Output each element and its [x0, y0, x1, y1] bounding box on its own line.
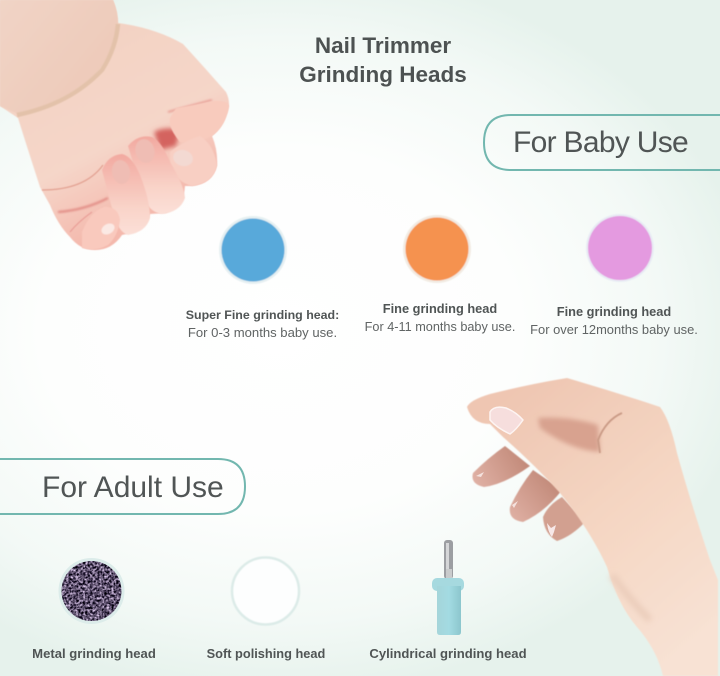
adult thumbnail [490, 407, 523, 434]
adult lower fingers [472, 446, 585, 541]
text: fine grinding head 4-11 months: For 4-11 months baby use. [365, 320, 515, 334]
label: soft polishing head: Soft polishing head [207, 646, 325, 661]
icon: baby hand [0, 0, 229, 250]
icon: metal grinding head [58, 558, 124, 624]
title [299, 33, 467, 87]
text: super fine grinding head: Super Fine grinding head: [186, 308, 339, 322]
label: cylindrical grinding head: Cylindrical grinding head [369, 646, 527, 661]
icon: baby fingers [82, 101, 229, 249]
text: fine grinding head over 12 months [530, 304, 698, 337]
icon: pink grinding head [586, 214, 654, 282]
text: fine grinding head 4-11 months: Fine grinding head [383, 301, 497, 316]
heading: for baby use: For Baby Use [513, 126, 688, 159]
text: fine grinding head 4-11 months [365, 301, 515, 334]
panel: for adult use outline [0, 459, 245, 514]
icon: soft polishing head [232, 558, 299, 624]
title: Nail Trimmer [315, 33, 451, 58]
text: fine grinding head over 12 months: Fine grinding head [557, 304, 671, 319]
label: metal grinding head: Metal grinding head [32, 646, 156, 661]
text: super fine grinding head [186, 308, 339, 340]
fist shadow gap [154, 128, 180, 150]
text: fine grinding head over 12 months: For over 12months baby use. [530, 322, 698, 337]
icon: blue grinding head [219, 216, 287, 284]
icon: adult hand [467, 378, 718, 676]
heading: for adult use: For Adult Use [42, 471, 224, 504]
text: super fine grinding head: For 0-3 months baby use. [188, 325, 337, 340]
panel: for baby use outline [484, 115, 720, 170]
icon: cylindrical grinding head [432, 540, 464, 635]
title: Grinding Heads [299, 62, 467, 87]
icon: orange grinding head [403, 215, 471, 283]
